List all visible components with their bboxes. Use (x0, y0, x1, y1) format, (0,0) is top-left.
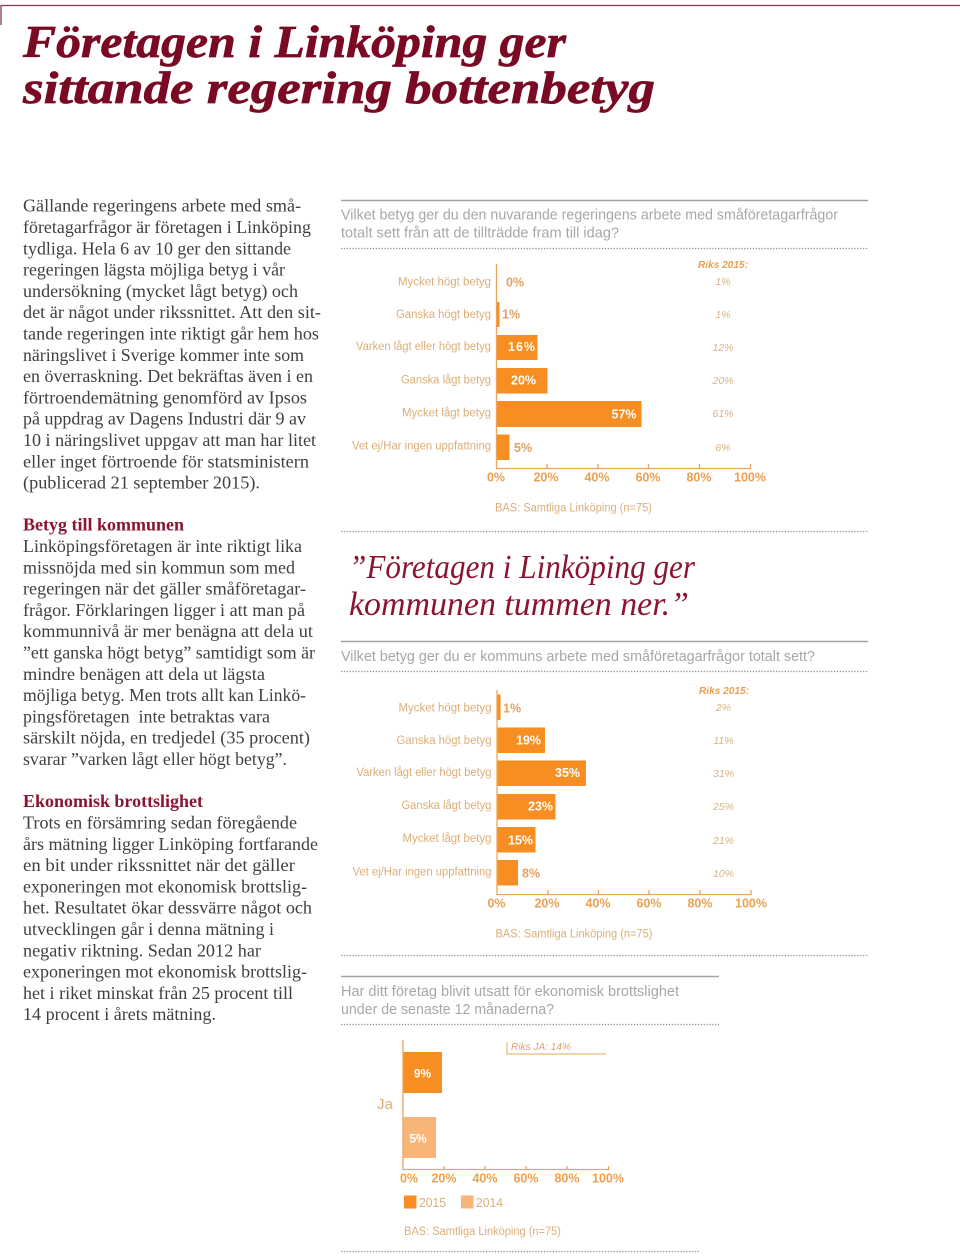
riks 2015 column: 11% (713, 735, 734, 747)
axis labels: 60% (513, 1172, 539, 1186)
axis labels: 80% (686, 470, 712, 484)
bars (496, 302, 642, 460)
value labels: 23% (528, 800, 553, 814)
title: Företagen i Linköping ger (22, 16, 567, 67)
axes (497, 690, 751, 894)
value labels (502, 276, 637, 455)
axis labels: 60% (635, 470, 661, 484)
row labels: Mycket lågt betyg (402, 833, 492, 845)
text block: brottslighet: utvecklingen går i denna mätning i (23, 919, 274, 939)
riks 2015 column: 21% (712, 835, 734, 847)
axis labels: 0% (487, 470, 505, 484)
text block: intro: tande regeringen inte riktigt går hem hos (23, 323, 319, 343)
text block: intro (23, 196, 321, 493)
value labels: 1% (502, 308, 520, 322)
row labels: Mycket högt betyg (398, 702, 492, 714)
value labels: 16% (508, 340, 535, 354)
value labels (503, 702, 580, 880)
riks 2015 column: 12% (712, 342, 734, 354)
heading: Ekonomisk brottslighet: Ekonomisk brottslighet (23, 791, 203, 811)
text block: brottslighet: het. Resultatet ökar dessvärre något och (23, 898, 312, 918)
row labels: Ganska lågt betyg (402, 800, 492, 812)
riks 2015 column: 31% (713, 768, 734, 780)
riks 2015 column: 2% (715, 702, 731, 714)
row labels (352, 702, 492, 878)
text block: intro: (publicerad 21 september 2015). (23, 473, 260, 493)
bar 2015: 9% (414, 1066, 432, 1080)
axis labels: 80% (554, 1172, 580, 1186)
text block: kommunen: regeringen när det gäller småföretagar- (23, 579, 306, 599)
base note: BAS: Samtliga Linköping (n=75) (404, 1226, 561, 1238)
text block: intro: tydliga. Hela 6 av 10 ger den sittande (23, 238, 291, 258)
row labels: Ganska lågt betyg (401, 374, 491, 386)
riks 2015 column: 20% (711, 375, 734, 387)
text block: kommunen: Linköpingsföretagen är inte riktigt lika (23, 536, 302, 556)
axis labels: 40% (584, 470, 610, 484)
row labels: Vet ej/Har ingen uppfattning (352, 440, 491, 452)
axis labels: 100% (735, 896, 767, 910)
riks 2015 column: 10% (713, 868, 734, 880)
axis labels: 20% (534, 896, 560, 910)
panel: chart 3 brottslighet (341, 976, 719, 1238)
riks 2015 column: 1% (715, 276, 731, 288)
value labels: 20% (511, 374, 536, 388)
top corner rule (1, 6, 960, 25)
axis labels (400, 1172, 624, 1186)
value labels: 5% (514, 441, 532, 455)
axis labels: 80% (687, 896, 713, 910)
text block: brottslighet: en bit under rikssnittet när det gäller (23, 855, 295, 875)
text block: kommunen: missnöjda med sin kommun som med (23, 557, 295, 577)
pull quote: kommunen tummen ner.” (349, 586, 689, 623)
question 3 (341, 984, 679, 1018)
question 3: Har ditt företag blivit utsatt för ekonomisk brottslighet (341, 984, 679, 1000)
row labels: Ganska högt betyg (396, 735, 492, 747)
text block: kommunen: ”ett ganska högt betyg” samtidigt som är (23, 642, 315, 662)
riks ja bracket (507, 1041, 606, 1054)
text block: kommunen: svarar ”varken lågt eller högt betyg”. (23, 749, 287, 769)
text block: intro: näringslivet i Sverige kommer inte som (23, 345, 304, 365)
text block: brottslighet: negativ riktning. Sedan 2012 har (23, 940, 261, 960)
question 1: Vilket betyg ger du den nuvarande regeringens arbete med småföretagarfrågor (341, 208, 838, 224)
text block: intro: eller inget förtroende för statsministern (23, 451, 309, 471)
axis labels: 40% (472, 1172, 498, 1186)
bar 2014: 5% (409, 1132, 427, 1146)
value labels: 15% (508, 834, 533, 848)
riks 2015 column: 25% (712, 801, 734, 813)
value labels: 19% (516, 734, 541, 748)
riks 2015 column: 6% (715, 442, 731, 454)
axis labels: 40% (585, 896, 611, 910)
text block: intro: förtroendemätning genomförd av Ipsos (23, 387, 307, 407)
pull quote: ”Företagen i Linköping ger (349, 549, 696, 586)
base note: BAS: Samtliga Linköping (n=75) (495, 502, 652, 514)
riks 2015 column: 61% (712, 408, 734, 420)
panel: chart 2 kommunen (341, 642, 868, 940)
text block: kommunen: frågor. Förklaringen ligger i att man på (23, 600, 305, 620)
text block: intro: Gällande regeringens arbete med små- (23, 196, 301, 216)
panel: chart 1 regeringen (341, 200, 868, 514)
axis labels: 60% (636, 896, 662, 910)
text block: kommunen: mindre benägen att dela ut lägsta (23, 664, 265, 684)
text block: kommunen (23, 536, 315, 769)
pull quote (349, 549, 696, 623)
text block: brottslighet: exponeringen mot ekonomisk brottslig- (23, 962, 307, 982)
text block: intro: 10 i näringslivet uppgav att man har litet (23, 430, 316, 450)
axis labels (487, 470, 766, 484)
text block: intro: undersökning (mycket lågt betyg) och (23, 281, 298, 301)
riks 2015 column (699, 685, 749, 880)
riks 2015 column: 1% (715, 309, 731, 321)
question 2: Vilket betyg ger du er kommuns arbete med småföretagarfrågor totalt sett? (341, 649, 815, 665)
value labels: 35% (555, 766, 580, 780)
axis labels: 100% (734, 470, 766, 484)
axis labels (487, 896, 767, 910)
legend (404, 1196, 503, 1210)
question 1: totalt sett från att de tillträdde fram till idag? (341, 226, 619, 242)
text block: brottslighet: 14 procent i årets mätning. (23, 1004, 216, 1024)
legend: 2014 (476, 1196, 503, 1210)
riks 2015 column (698, 259, 748, 454)
row labels (352, 276, 491, 452)
text block: intro: regeringen lägsta möjliga betyg i vår (23, 260, 285, 280)
value labels: 0% (506, 276, 524, 290)
axes (403, 1040, 608, 1170)
axis labels: 0% (400, 1172, 418, 1186)
text block: intro: på uppdrag av Dagens Industri där 9 av (23, 409, 306, 429)
title (22, 16, 655, 113)
row labels: Varken lågt eller högt betyg (356, 341, 491, 353)
text block: brottslighet (23, 812, 318, 1024)
riks 2015 column: Riks 2015: (699, 685, 749, 697)
axes (496, 264, 750, 468)
value labels: 1% (503, 702, 521, 716)
text block: intro: företagarfrågor är företagen i Linköping (23, 217, 311, 237)
text block: kommunen: möjliga betyg. Men trots allt kan Linkö- (23, 685, 306, 705)
axis labels: 0% (487, 896, 506, 910)
row labels: Varken lågt eller högt betyg (356, 767, 492, 779)
text block: brottslighet: het i riket minskat från 25 procent till (23, 983, 293, 1003)
text block: kommunen: särskilt nöjda, en tredjedel (35 procent) (23, 728, 310, 748)
bars (497, 694, 586, 886)
row labels: Mycket högt betyg (398, 276, 491, 288)
axis labels: 20% (431, 1172, 457, 1186)
value labels: 57% (612, 408, 637, 422)
category label: Ja (377, 1096, 394, 1113)
text block: kommunen: pingsföretagen inte betraktas vara (23, 706, 270, 726)
row labels: Mycket lågt betyg (402, 408, 491, 420)
axis labels: 100% (592, 1172, 624, 1186)
bar 2015 (403, 1052, 442, 1093)
text block: kommunen: kommunnivå är mer benägna att dela ut (23, 621, 313, 641)
heading: Betyg till kommunen: Betyg till kommunen (23, 515, 184, 535)
riks 2015 column: Riks 2015: (698, 259, 748, 271)
base note: BAS: Samtliga Linköping (n=75) (496, 928, 653, 940)
question 3: under de senaste 12 månaderna? (341, 1002, 554, 1018)
riks ja bracket: Riks JA: 14% (511, 1041, 571, 1053)
text block: brottslighet: exponeringen mot ekonomisk brottslig- (23, 876, 307, 896)
title: sittande regering bottenbetyg (22, 62, 655, 113)
value labels: 8% (522, 866, 540, 880)
row labels: Ganska högt betyg (396, 309, 491, 321)
bar 2014 (403, 1117, 436, 1158)
legend: 2015 (419, 1196, 446, 1210)
text block: intro: en överraskning. Det bekräftas även i en (23, 366, 313, 386)
question 1 (341, 208, 838, 242)
text block: brottslighet: Trots en försämring sedan föregående (23, 812, 297, 832)
row labels: Vet ej/Har ingen uppfattning (352, 866, 492, 878)
text block: brottslighet: års mätning ligger Linköping fortfarande (23, 834, 318, 854)
axis labels: 20% (533, 470, 559, 484)
text block: intro: det är något under rikssnittet. Att den sit- (23, 302, 321, 322)
